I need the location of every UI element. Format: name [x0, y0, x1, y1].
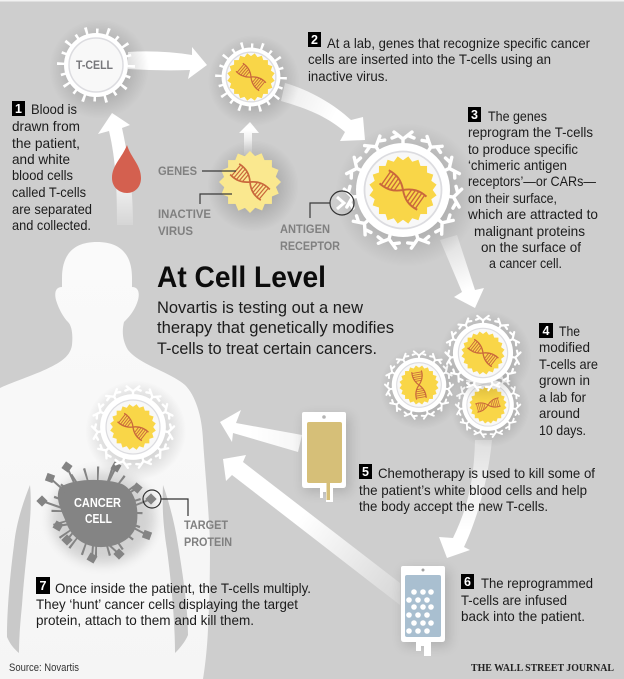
source: Source: Novartis [9, 662, 79, 674]
callout: inactive virus: INACTIVE [158, 207, 211, 221]
arrow: cluster to infusion bag [439, 440, 492, 558]
step 1 text: are separated [12, 201, 92, 217]
T-cell [49, 19, 149, 119]
arrow: T-cell to gene-inserted cell [128, 47, 207, 79]
step 7 text: 7 [40, 579, 47, 593]
intro text: therapy that genetically modifies [157, 318, 394, 337]
cancer cell [36, 461, 157, 564]
step 3 text: to produce specific [468, 141, 578, 157]
callout: target protein: TARGET [184, 518, 229, 532]
step 2 text: cells are inserted into the T-cells using an [308, 51, 551, 67]
T-cell cluster [380, 310, 532, 447]
step 2 text: At a lab, genes that recognize specific cancer [327, 35, 590, 51]
step 1 text: and collected. [12, 217, 91, 233]
step 2 text: inactive virus. [308, 68, 388, 84]
step 4 text: 10 days. [539, 422, 586, 438]
step 1 text: Blood is [31, 101, 77, 117]
arrow: chemo bag to body [220, 410, 302, 452]
step 1 text: drawn from [12, 118, 80, 134]
callout: antigen receptor: ANTIGEN [280, 222, 330, 236]
callout: inactive virus: VIRUS [158, 224, 193, 238]
callout: genes: GENES [158, 164, 197, 178]
step 6 text: T-cells are infused [461, 592, 567, 608]
step 7 text: Once inside the patient, the T-cells multiply. [55, 580, 311, 596]
step 6 text: back into the patient. [461, 608, 585, 624]
intro text [157, 298, 394, 358]
step 7 text [36, 577, 311, 628]
CAR T-cell [335, 123, 479, 267]
step 5 text: 5 [362, 465, 369, 479]
arrow: virus to cell [239, 122, 259, 155]
arrow: infusion bag to body [223, 455, 400, 605]
step 4 text: The [559, 323, 580, 339]
step 6 text [461, 574, 593, 624]
inactive virus with genes [207, 140, 299, 232]
step 3 text: which are attracted to [467, 206, 598, 222]
step 5 text: the body accept the new T-cells. [359, 498, 548, 514]
cancer cell label: CANCER [74, 496, 121, 510]
step 3 text: The genes [488, 108, 547, 124]
intro text: T-cells to treat certain cancers. [157, 339, 377, 358]
step 4 text: modified [539, 339, 590, 355]
step 4 text [539, 323, 598, 438]
callout: genes [158, 164, 236, 178]
cell: top [439, 310, 532, 402]
callout: antigen receptor: RECEPTOR [280, 239, 340, 253]
step 6 text: 6 [464, 575, 471, 589]
chemotherapy bag [302, 412, 350, 502]
step 3 text [467, 107, 598, 271]
step 5 text [359, 464, 595, 514]
infusion bag [401, 566, 449, 656]
step 4 text: around [539, 405, 580, 421]
callout: target protein: PROTEIN [184, 535, 232, 549]
step 1 text: called T-cells [12, 184, 86, 200]
step 4 text: a lab for [539, 389, 586, 405]
step 7 text: They ‘hunt’ cancer cells displaying the target [36, 596, 298, 612]
body silhouette [0, 242, 210, 679]
callout: inactive virus [158, 194, 232, 238]
step 4 text: 4 [543, 324, 550, 338]
cell receiving genes [208, 35, 300, 127]
T-cell label: T-CELL [76, 58, 113, 72]
cell: lower right [451, 368, 530, 447]
cell: left [380, 346, 463, 430]
callout: target protein [143, 490, 232, 549]
step 3 text: reprogram the T-cells [468, 124, 593, 140]
intro text: Novartis is testing out a new [157, 298, 364, 317]
cancer cell label: CELL [85, 512, 112, 526]
step 2 text: 2 [311, 33, 318, 47]
step 4 text: grown in [539, 372, 590, 388]
step 2 text [308, 32, 590, 84]
arrow: cell to CAR cell [281, 83, 365, 141]
step 1 text: the patient, [12, 135, 80, 151]
T-cell attacking inside body [85, 380, 186, 481]
step 1 text: 1 [15, 102, 22, 116]
step 3 text: malignant proteins [474, 223, 585, 239]
step 5 text: the patient’s white blood cells and help [359, 482, 587, 498]
step 5 text: Chemotherapy is used to kill some of [378, 465, 595, 481]
step 3 text: on the surface of [481, 239, 581, 255]
title: At Cell Level [157, 261, 326, 294]
arrow: blood to T-cell [98, 113, 133, 225]
cancer cell label [74, 496, 121, 526]
arrow: CAR cell to cluster [440, 235, 484, 308]
step 3 text: ‘chimeric antigen [468, 157, 567, 173]
credit: THE WALL STREET JOURNAL [471, 663, 614, 674]
step 4 text: T-cells are [539, 356, 598, 372]
icon: blood drop [112, 145, 141, 193]
step 3 text: 3 [471, 108, 478, 122]
step 1 text: and white [12, 151, 70, 167]
step 6 text: The reprogrammed [481, 575, 593, 591]
callout: antigen receptor [280, 191, 354, 253]
step 3 text: receptors’—or CARs— [468, 173, 596, 189]
step 7 text: protein, attach to them and kill them. [36, 612, 254, 628]
step 1 text: blood cells [12, 167, 73, 183]
step 3 text: a cancer cell. [489, 255, 562, 271]
step 1 text [12, 101, 92, 233]
step 3 text: on their surface, [468, 190, 557, 206]
